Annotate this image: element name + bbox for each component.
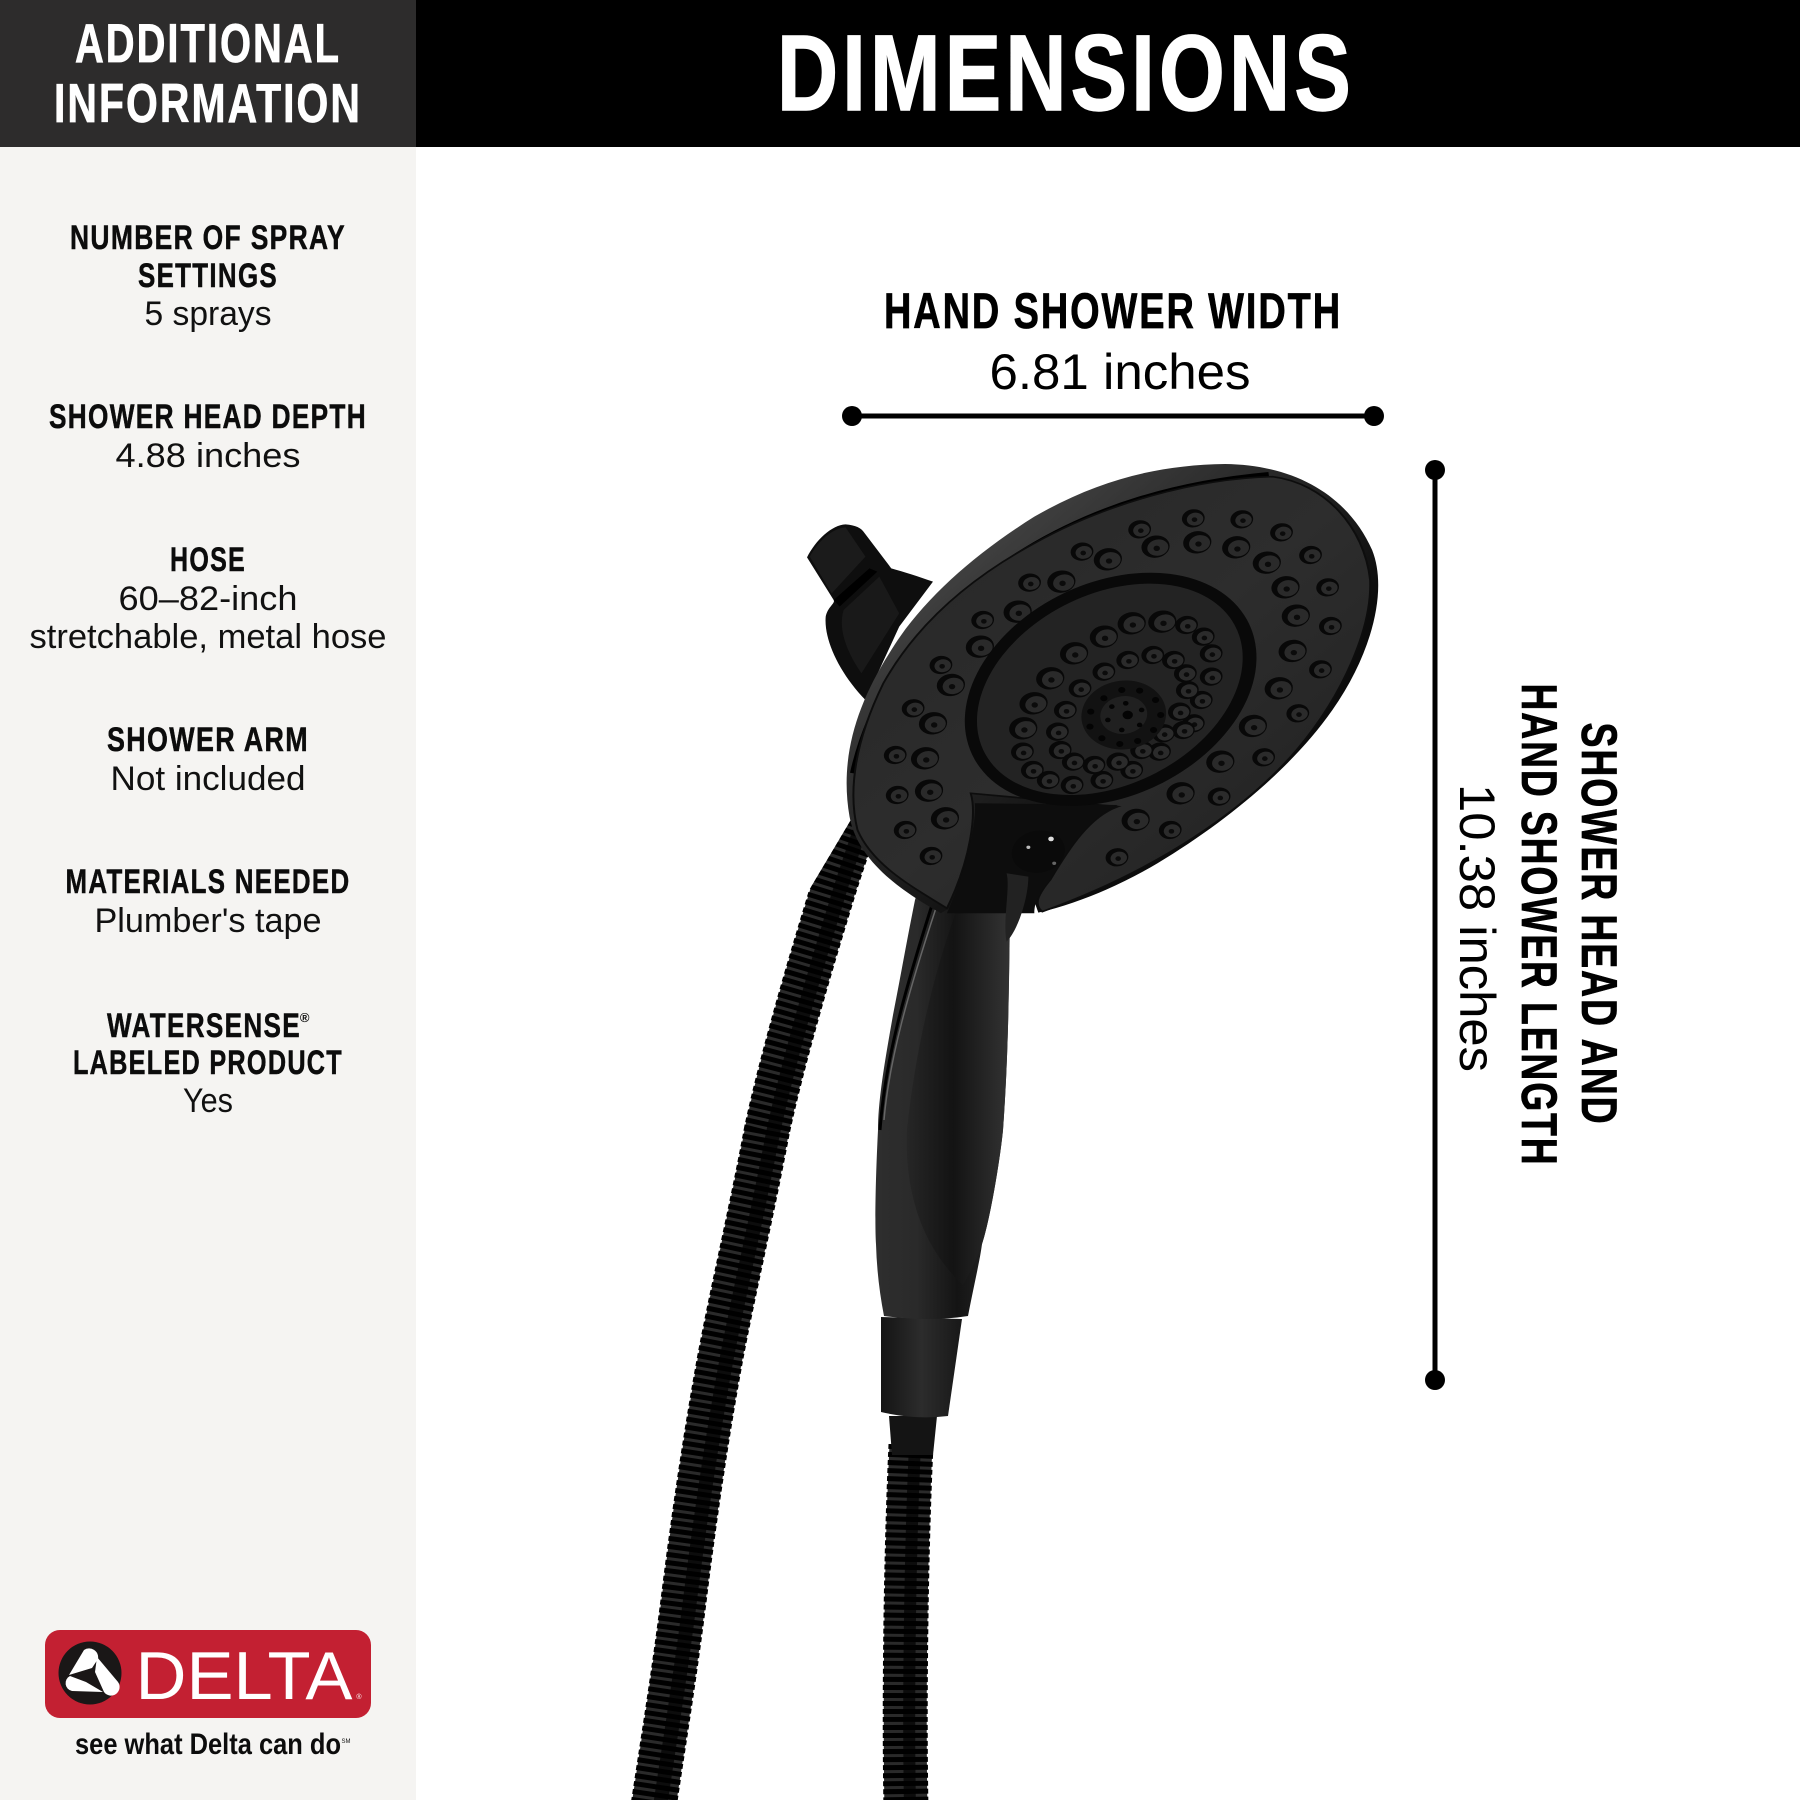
delta logo (45, 1630, 371, 1761)
spec: watersense labeled product: LABELED PRODUCT (73, 1044, 343, 1082)
width arrow line (842, 406, 1384, 426)
shower head (807, 464, 1378, 942)
delta logo: see what Delta can do (75, 1728, 341, 1761)
header: dimensions title (416, 0, 1800, 147)
spec: shower head depth: SHOWER HEAD DEPTH (49, 398, 367, 436)
spec: hose (30, 541, 386, 656)
spec: watersense labeled product: Yes (183, 1082, 233, 1120)
length dimension (1425, 460, 1627, 1390)
spec: number of spray settings: NUMBER OF SPRAY (70, 219, 346, 257)
center spray recess (909, 525, 1312, 854)
spec: materials needed: MATERIALS NEEDED (66, 863, 350, 901)
head rim (847, 464, 1378, 913)
spec: shower arm: SHOWER ARM (107, 721, 309, 759)
collar (881, 1317, 962, 1417)
head face (853, 477, 1370, 912)
header: additional information (0, 0, 416, 147)
spec: materials needed: Plumber's tape (94, 902, 322, 940)
delta logo: SM (342, 1739, 351, 1745)
width label: HAND SHOWER WIDTH (884, 283, 1342, 339)
spec: hose: HOSE (170, 541, 246, 579)
spec: hose: stretchable, metal hose (30, 618, 386, 656)
spec: watersense labeled product (73, 1007, 343, 1120)
spec: shower arm: Not included (110, 760, 306, 798)
grip handle (875, 890, 1012, 1319)
spec: materials needed (66, 863, 350, 940)
spec list (30, 219, 386, 1120)
length label: HAND SHOWER LENGTH (1511, 684, 1567, 1166)
rim shadow line (854, 475, 1269, 773)
hose right (905, 1445, 915, 1800)
spec: shower arm (107, 721, 309, 798)
neck under head (947, 803, 1118, 913)
length value: 10.38 inches (1449, 784, 1505, 1072)
delta logo: ® (356, 1693, 362, 1701)
center stipple cluster (1066, 668, 1181, 762)
spec: watersense labeled product: ® (300, 1010, 310, 1025)
spec: shower head depth (49, 398, 367, 475)
length label: SHOWER HEAD AND (1571, 722, 1627, 1126)
swivel connector (807, 524, 933, 700)
spec: number of spray settings (70, 219, 346, 333)
spec: number of spray settings: 5 sprays (144, 295, 272, 333)
header: additional information: ADDITIONAL (75, 12, 341, 74)
spec: shower head depth: 4.88 inches (116, 437, 300, 475)
header: additional information: INFORMATION (54, 72, 362, 134)
product: hand shower (653, 464, 1378, 1800)
length label (1511, 684, 1627, 1166)
sidebar background (0, 147, 416, 1800)
spray selector toggle (1003, 822, 1074, 942)
header: dimensions title: DIMENSIONS (777, 12, 1355, 133)
spec: watersense labeled product: WATERSENSE (107, 1007, 301, 1045)
inner nozzles (1005, 607, 1226, 797)
spec: hose: 60–82-inch (118, 580, 298, 618)
width dimension (842, 283, 1384, 426)
outer nozzles (880, 506, 1345, 870)
width value: 6.81 inches (990, 344, 1250, 400)
hose stub (889, 1416, 937, 1455)
spec: number of spray settings: SETTINGS (138, 257, 278, 295)
length line (1425, 460, 1445, 1390)
hose left (653, 815, 864, 1800)
center spray disk (927, 540, 1293, 838)
delta logo: DELTA (136, 1638, 353, 1714)
